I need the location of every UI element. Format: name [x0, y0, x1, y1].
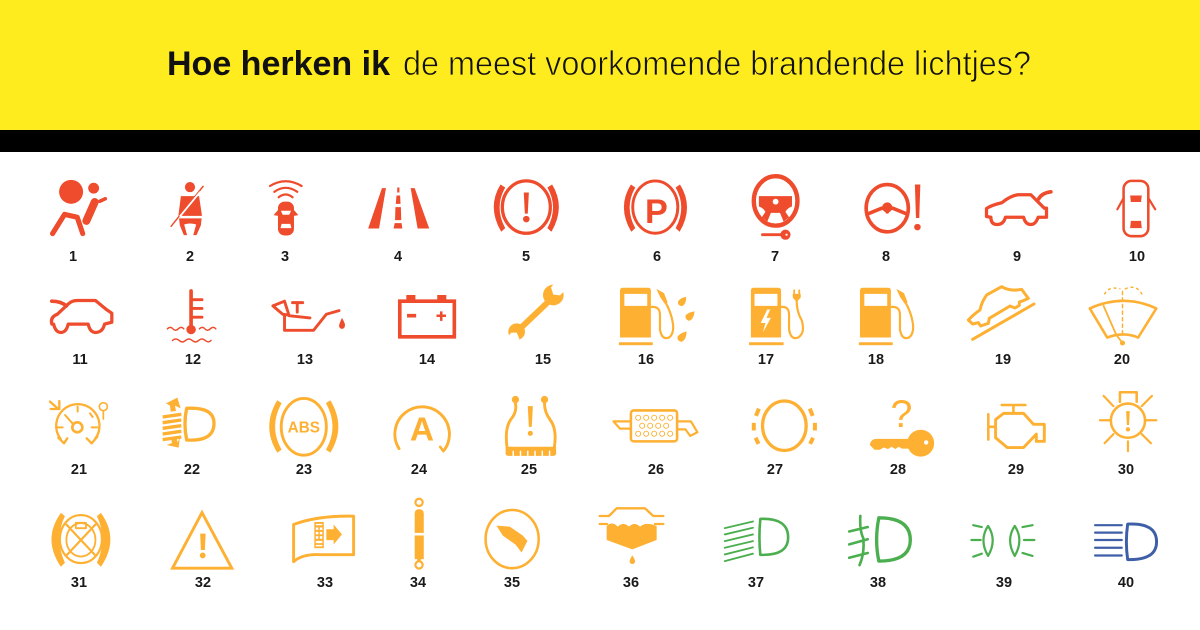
icon 25: tyre pressure	[506, 396, 556, 456]
icon 12: coolant temperature	[167, 291, 216, 342]
number labels row 2	[72, 352, 1130, 368]
icon 13: oil can	[273, 301, 345, 330]
number labels row 4	[71, 575, 1134, 591]
number labels row 3: 21	[71, 462, 87, 478]
black divider band	[0, 130, 1200, 152]
title: de meest voorkomende brandende lichtjes?	[403, 45, 1031, 83]
number labels row 4: 37	[748, 575, 764, 591]
icon 19: car on slope	[968, 287, 1034, 339]
icon 7: steering lock with key	[754, 176, 797, 240]
icon 5: brake warning	[494, 181, 559, 233]
title: Hoe herken ik	[167, 45, 390, 83]
number labels row 4: 38	[870, 575, 886, 591]
icon 28: key not detected: ?	[891, 392, 912, 436]
number labels row 1: 4	[394, 249, 402, 265]
number labels row 2: 13	[297, 352, 313, 368]
icon 21: speed limiter	[50, 401, 107, 443]
number labels row 3: 28	[890, 462, 906, 478]
number labels row 1: 8	[882, 249, 890, 265]
number labels row 2: 20	[1114, 352, 1130, 368]
number labels row 4: 33	[317, 575, 333, 591]
icon 30: lamp fault	[1100, 392, 1156, 451]
number labels row 2: 16	[638, 352, 654, 368]
icon 36: oil level	[600, 508, 663, 564]
icon 17: electric charging station	[749, 288, 803, 345]
number labels row 1: 3	[281, 249, 289, 265]
icon 24: automatic A: A	[410, 411, 434, 448]
number labels row 2: 11	[72, 352, 88, 368]
number labels row 4: 39	[996, 575, 1012, 591]
number labels row 2: 18	[868, 352, 884, 368]
icon 15: wrench	[507, 283, 567, 343]
icon 40: high beam	[1095, 524, 1157, 560]
number labels row 3: 30	[1118, 462, 1134, 478]
icon 4: road lane	[368, 187, 429, 229]
number labels row 3: 22	[184, 462, 200, 478]
number labels row 2: 17	[758, 352, 774, 368]
icon 8: steering wheel warning	[866, 185, 921, 232]
number labels row 3	[71, 462, 1134, 478]
icon 32: warning triangle	[173, 513, 232, 568]
number labels row 2: 19	[995, 352, 1011, 368]
number labels row 1: 9	[1013, 249, 1021, 265]
number labels row 2: 15	[535, 352, 551, 368]
icon 22: headlight range	[163, 398, 214, 448]
icon 6: parking brake: P	[645, 193, 668, 231]
number labels row 3: 29	[1008, 462, 1024, 478]
number labels row 3: 26	[648, 462, 664, 478]
icon 10: car with open doors	[1117, 181, 1155, 236]
icon 9: car with open trunk	[987, 192, 1051, 225]
number labels row 1: 6	[653, 249, 661, 265]
icon 1: airbag	[53, 180, 105, 234]
number labels row 1: 1	[69, 249, 77, 265]
number labels row 1: 7	[771, 249, 779, 265]
number labels row 1: 5	[522, 249, 530, 265]
icon 18: fuel pump	[859, 288, 913, 345]
number labels row 3: 27	[767, 462, 783, 478]
icon 24: automatic A	[395, 407, 449, 451]
number labels row 3: 23	[296, 462, 312, 478]
number labels row 4: 36	[623, 575, 639, 591]
icon 37: low beam	[725, 519, 788, 561]
icon 16: fuel pump with drops	[619, 288, 695, 345]
icon 26: particulate filter	[613, 410, 697, 441]
icon 28: key not detected	[870, 392, 934, 457]
icon 6: parking brake	[624, 181, 687, 233]
header band	[0, 0, 1200, 130]
number labels row 4: 34	[410, 575, 426, 591]
number labels row 1: 10	[1129, 249, 1145, 265]
icon 38: front fog light	[849, 516, 910, 565]
icon 34: shock absorber	[415, 499, 424, 569]
icon 27: lamp circle	[754, 401, 815, 450]
icon 31: brake pad wear	[51, 513, 110, 567]
number labels row 1: 2	[186, 249, 194, 265]
icon 11: car with open hood	[51, 300, 112, 332]
number labels row 2: 12	[185, 352, 201, 368]
number labels row 2: 14	[419, 352, 435, 368]
icon 29: check engine	[988, 405, 1044, 448]
number labels row 4: 31	[71, 575, 87, 591]
number labels row 4: 32	[195, 575, 211, 591]
icon 2: seat belt	[171, 182, 203, 235]
number labels row 1	[69, 249, 1145, 265]
icon 39: side lights	[971, 525, 1034, 557]
number labels row 3: 25	[521, 462, 537, 478]
number labels row 4: 35	[504, 575, 520, 591]
number labels row 3: 24	[411, 462, 427, 478]
icon 14: battery	[400, 295, 454, 337]
icon 33: filter in rear window	[294, 516, 354, 562]
icon 20: windscreen washer	[1090, 287, 1156, 346]
icon 35: accelerator pedal	[486, 510, 539, 568]
icon 23: ABS	[269, 398, 338, 455]
icon 23: ABS: ABS	[288, 419, 320, 436]
icon 3: car with sensor waves	[270, 181, 302, 235]
number labels row 4: 40	[1118, 575, 1134, 591]
